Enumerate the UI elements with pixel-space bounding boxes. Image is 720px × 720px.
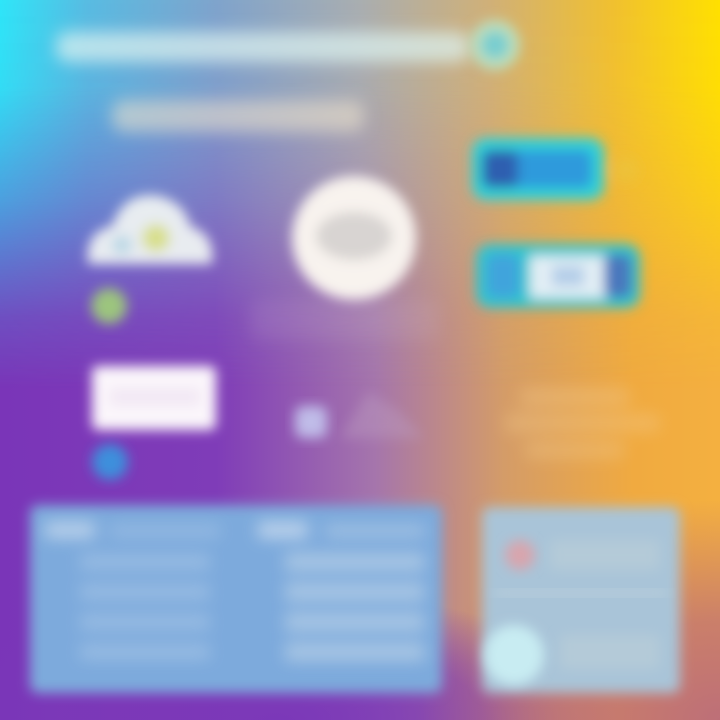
faint connector lines — [250, 300, 440, 340]
button: blue and cyan — [472, 138, 639, 200]
title — [56, 32, 470, 132]
background top wash — [0, 0, 720, 365]
text block: upper — [550, 540, 660, 570]
icon: small lavender square — [295, 406, 327, 438]
text block: left column — [45, 522, 220, 659]
faint text block — [505, 388, 660, 458]
icon: red mark — [505, 540, 535, 570]
icon: white circle — [292, 176, 416, 300]
icon: title badge — [470, 20, 520, 70]
text block: right column — [258, 522, 425, 661]
icon: blue dot — [92, 444, 128, 480]
chart: faint mountain shape — [340, 392, 424, 438]
icon: green dot — [91, 288, 127, 324]
panel: lower left — [30, 505, 442, 693]
divider band — [495, 590, 667, 596]
button: multi-segment — [476, 244, 640, 308]
white card — [92, 366, 216, 430]
icon: pale circle — [484, 625, 544, 685]
text block: lower — [560, 635, 660, 669]
panel: lower right — [482, 507, 680, 693]
icon: cloud — [88, 195, 213, 264]
